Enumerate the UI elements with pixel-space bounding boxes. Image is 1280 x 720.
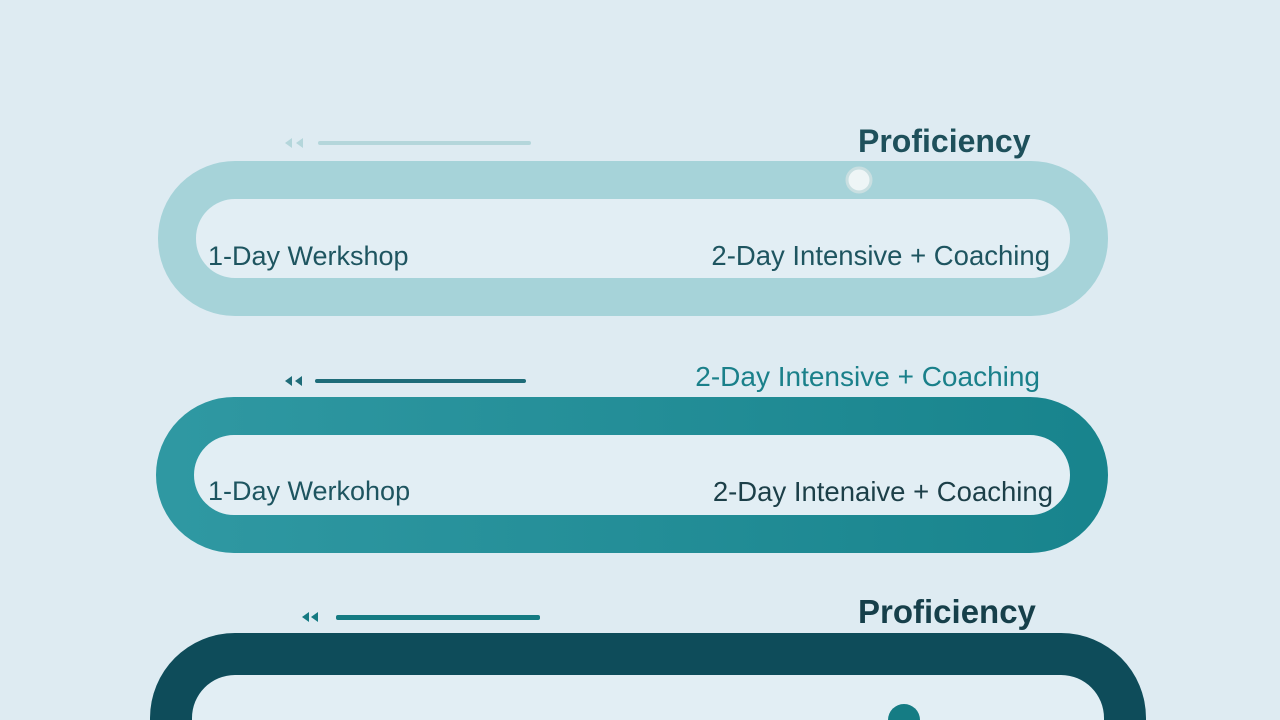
marker <box>888 704 920 720</box>
heading: proficiency bottom: Proficiency <box>858 593 1037 630</box>
heading: proficiency top: Proficiency <box>858 123 1031 159</box>
arrow: row 2 <box>285 376 526 386</box>
track 1 <box>177 168 1089 297</box>
marker: slider knob <box>847 168 871 192</box>
arrow: row 1 <box>285 138 531 148</box>
arrow: row 3 <box>302 612 540 622</box>
heading: row 2: 2-Day Intensive + Coaching <box>695 361 1040 392</box>
track 2 <box>175 416 1089 534</box>
label: 1-day workshop: 1-Day Werkohop <box>208 476 410 506</box>
label: 1-day workshop: 1-Day Werkshop <box>208 241 409 271</box>
label: 2-day intensive: 2-Day Intenaive + Coaching <box>713 476 1053 507</box>
label: 2-day intensive: 2-Day Intensive + Coaching <box>711 240 1050 271</box>
track 3 <box>150 633 1146 720</box>
